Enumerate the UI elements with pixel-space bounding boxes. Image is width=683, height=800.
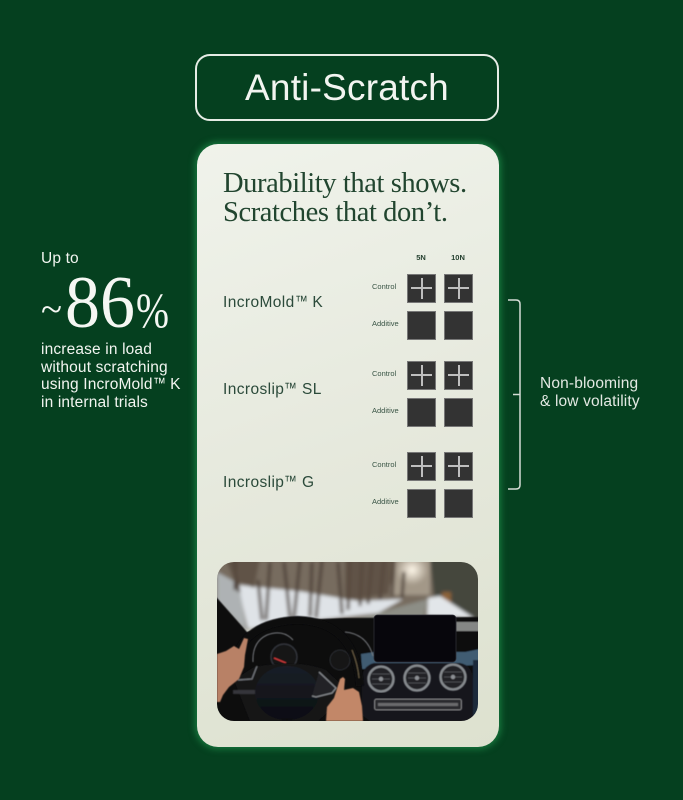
stat description <box>41 341 181 411</box>
heading: Durability that shows: Scratches that don’t. <box>223 197 448 228</box>
swatch: control 10N scratched <box>445 452 472 480</box>
panel: durability card <box>197 144 499 747</box>
swatch: control 10N scratched <box>445 274 472 302</box>
swatch: additive 5N clean <box>408 312 435 338</box>
swatch: additive 5N clean <box>408 398 435 426</box>
side note: non-blooming and low volatility: & low volatility <box>540 393 640 410</box>
product label: ™ <box>295 292 307 310</box>
swatch: control 5N scratched <box>408 452 435 480</box>
left hand <box>217 638 248 702</box>
stat callout: 86 percent increase <box>41 250 181 411</box>
title badge: Anti-Scratch <box>195 54 499 121</box>
product label: Incroslip SL <box>223 381 322 398</box>
right hand <box>326 677 363 721</box>
row label: Additive: Additive <box>372 406 399 415</box>
stat description: in internal trials <box>41 394 148 411</box>
row label: Additive: Additive <box>372 319 399 328</box>
stat lead-in: Up to <box>41 250 79 267</box>
product row: IncroMold K <box>223 274 473 340</box>
column header: 5N: 5N <box>416 253 426 262</box>
heading: Durability that shows <box>223 168 467 228</box>
row label: Control: Control <box>372 369 396 378</box>
stat figure <box>41 270 169 340</box>
product label: IncroMold K <box>223 294 323 311</box>
column header: 10N: 10N <box>451 253 465 262</box>
product row: Incroslip G <box>223 452 473 518</box>
swatch: control 5N scratched <box>408 274 435 302</box>
stat description: using IncroMold K <box>41 376 181 393</box>
swatch: additive 10N clean <box>445 398 472 426</box>
swatch: additive 5N clean <box>408 490 435 516</box>
stat figure: ~ <box>41 289 62 331</box>
heading: Durability that shows: Durability that shows. <box>223 168 467 199</box>
dashboard <box>210 590 482 727</box>
swatch: additive 10N clean <box>445 312 472 338</box>
air vents <box>368 664 466 692</box>
product label: Incroslip G <box>223 474 314 491</box>
swatch: additive 10N clean <box>445 490 472 516</box>
climate control strip <box>374 699 462 710</box>
side note: non-blooming and low volatility <box>540 375 640 410</box>
stat description: without scratching <box>41 359 168 376</box>
title badge: Anti-Scratch: Anti-Scratch <box>245 67 449 108</box>
swatch: control 10N scratched <box>445 362 472 388</box>
product label: ™ <box>284 380 297 396</box>
stat description: increase in load <box>41 341 152 358</box>
row label: Control: Control <box>372 460 396 469</box>
product label: ™ <box>284 472 297 490</box>
swatch: control 5N scratched <box>408 362 435 388</box>
stat description: ™ <box>153 375 165 392</box>
centre screen <box>374 615 456 662</box>
instrument cluster <box>253 632 373 670</box>
side note: non-blooming and low volatility: Non-blooming <box>540 375 638 392</box>
row label: Control: Control <box>372 282 396 291</box>
product row: Incroslip SL <box>223 361 473 427</box>
steering wheel <box>232 620 360 721</box>
photo: car interior on a snowy road <box>217 562 478 721</box>
bracket connecting product rows <box>508 299 521 490</box>
forest, snow and road seen through windshield <box>210 555 485 632</box>
row label: Additive: Additive <box>372 497 399 506</box>
